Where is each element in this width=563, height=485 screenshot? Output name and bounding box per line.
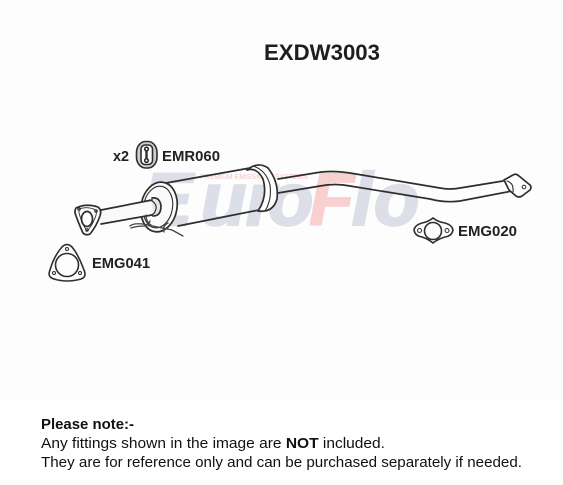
part label: x2: x2	[113, 148, 129, 165]
note text block	[41, 416, 522, 471]
watermark logo: PREMIUM EMISSIONS SYSTEMS	[200, 174, 308, 181]
rear flange	[504, 174, 531, 197]
silencer end ring	[137, 179, 181, 235]
rear pipe	[278, 172, 512, 202]
note line 1: Any fittings shown in the image are NOT included.	[41, 435, 385, 452]
part label: EMR060: EMR060	[162, 148, 220, 165]
watermark logo: F	[309, 158, 356, 241]
exhaust pipe assembly	[75, 165, 531, 236]
watermark logo: lo	[352, 158, 419, 241]
icon: gasket EMG020	[414, 218, 453, 243]
front flange	[75, 205, 101, 235]
part label: EMG020: EMG020	[458, 223, 517, 240]
silencer body	[166, 165, 277, 226]
note line 2: They are for reference only and can be purchased separately if needed.	[41, 454, 522, 471]
icon: gasket EMG041	[49, 244, 85, 281]
title: EXDW3003	[264, 40, 380, 65]
watermark logo	[143, 158, 419, 241]
clamp wire	[130, 215, 183, 236]
icon: rubber mount EMR060	[136, 142, 157, 168]
front pipe	[101, 199, 156, 224]
note heading: Please note:-	[41, 416, 134, 433]
part label: EMG041: EMG041	[92, 255, 150, 272]
watermark logo: Euro	[143, 158, 313, 241]
